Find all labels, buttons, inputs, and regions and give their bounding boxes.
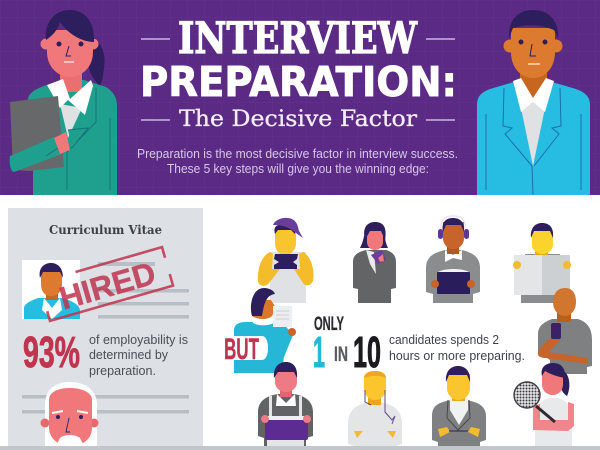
stat description: of employability is: [89, 333, 188, 347]
person: man in grey jacket: [432, 366, 486, 446]
stat: only 1 in 10: 1: [313, 328, 325, 377]
stat description: preparation.: [89, 364, 156, 378]
hired stamp: HIRED: [55, 255, 160, 316]
stat description: determined by: [89, 348, 169, 362]
candidates text: candidates spends 2: [389, 333, 499, 347]
header banner: [0, 0, 600, 195]
title: INTERVIEW: [178, 14, 418, 64]
intro text: Preparation is the most decisive factor in interview success.: [137, 147, 458, 161]
stat: only 1 in 10: 10: [353, 328, 381, 377]
CV heading: Curriculum Vitae: [49, 223, 162, 237]
BUT label: BUT: [224, 333, 259, 366]
stat: only 1 in 10: IN: [334, 343, 348, 366]
icon: man in blue suit: [477, 10, 590, 195]
subtitle: The Decisive Factor: [179, 107, 418, 132]
icon: older man: [40, 382, 98, 446]
CV text lines: [22, 262, 189, 414]
stat: only 1 in 10: ONLY: [314, 313, 344, 335]
title rules: [141, 39, 455, 120]
stat: only 1 in 10: [313, 313, 381, 377]
person: woman reading CV with BUT label: [220, 288, 296, 373]
person: doctor with stethoscope: [348, 371, 402, 446]
person: man reading newspaper: [513, 223, 571, 303]
candidates text: hours or more preparing.: [389, 349, 525, 363]
icon: woman with folder: [10, 10, 117, 195]
person: woman with phone: [353, 222, 396, 303]
person: man with headphones and book: [426, 216, 480, 303]
title: [140, 14, 457, 106]
person: man with apron and box: [258, 362, 313, 446]
hired stamp: [39, 247, 173, 321]
person: yellow man in cap with tablet: [258, 218, 314, 303]
CV photo: [22, 260, 80, 319]
stat description: [89, 333, 188, 378]
title: PREPARATION:: [140, 58, 457, 106]
bottom band: [0, 446, 600, 450]
person: woman with tennis racket: [514, 363, 574, 446]
candidates text: [389, 333, 525, 363]
stat: 93%: 93%: [23, 328, 80, 377]
intro text: These 5 key steps will give you the winning edge:: [167, 162, 429, 176]
person: bald man with phone: [538, 288, 592, 374]
intro text: [137, 147, 458, 176]
panel: curriculum vitae: [8, 208, 203, 446]
